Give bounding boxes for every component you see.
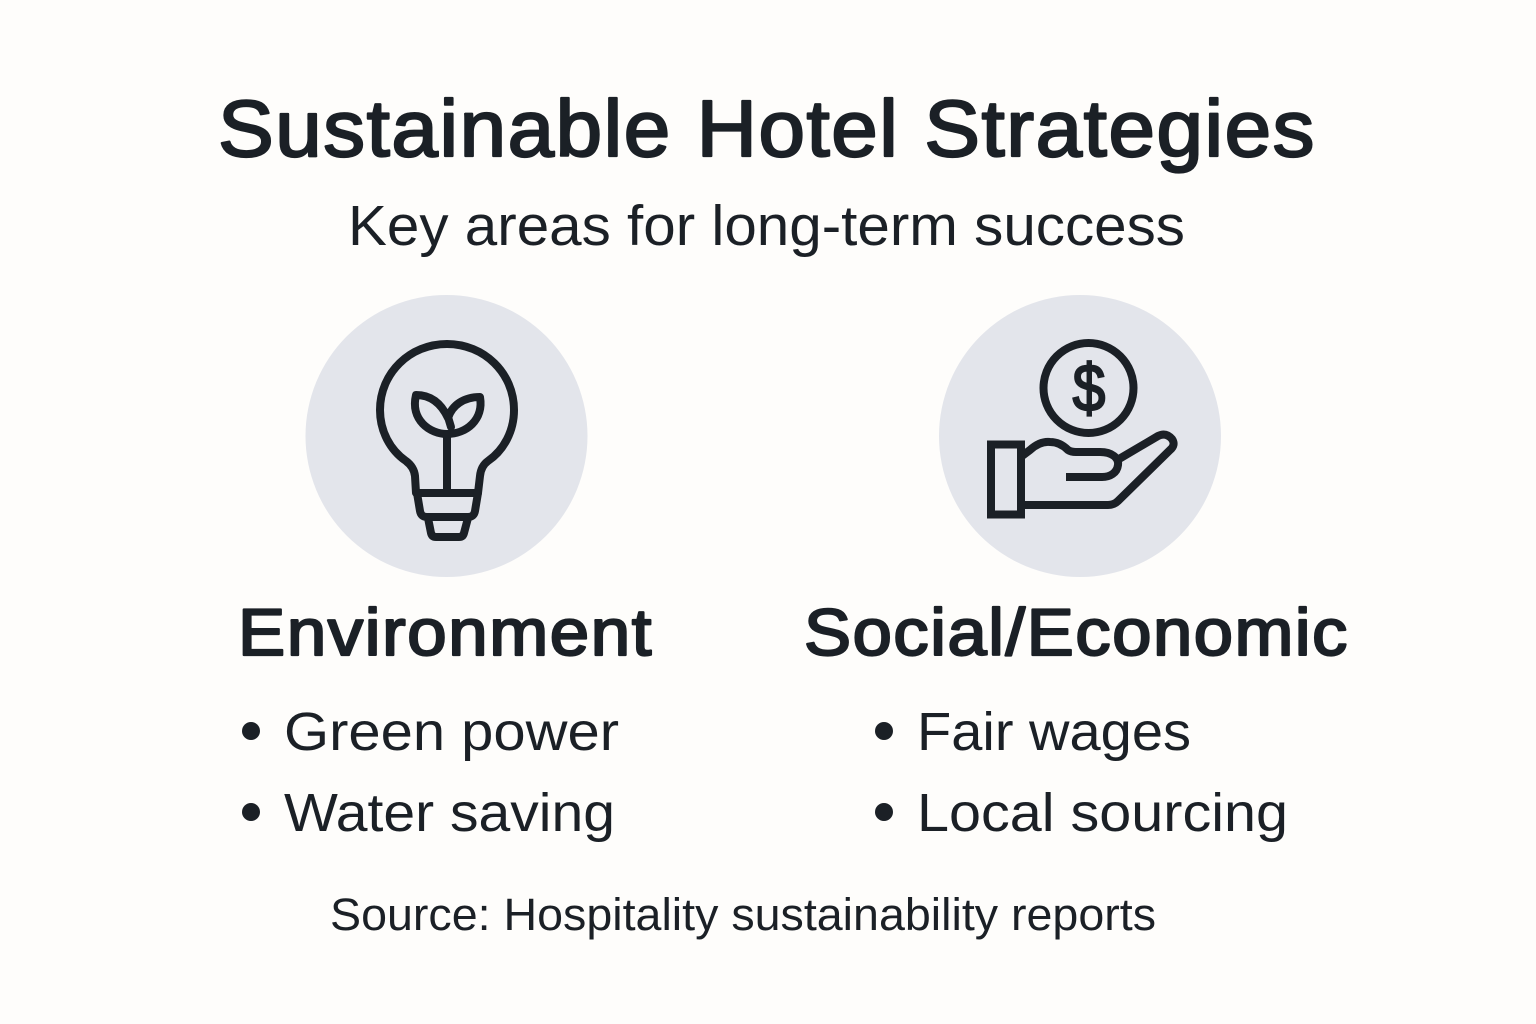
icon: light bulb with sprout bbox=[306, 295, 588, 577]
list: social and economic items bbox=[875, 702, 1288, 843]
panel: environment bbox=[238, 295, 653, 843]
icon: hand holding coin: $ bbox=[1073, 351, 1105, 426]
list: social and economic items: Local sourcing bbox=[917, 783, 1288, 843]
heading: social/economic: Social/Economic bbox=[804, 595, 1349, 669]
list: environment items: Green power bbox=[284, 702, 619, 762]
title: Sustainable Hotel Strategies bbox=[218, 84, 1316, 173]
panel: social and economic bbox=[804, 295, 1349, 843]
list: environment items bbox=[242, 702, 619, 843]
subtitle: Key areas for long-term success bbox=[348, 194, 1185, 258]
list: social and economic items: Fair wages bbox=[917, 702, 1191, 762]
icon: hand holding coin bbox=[939, 295, 1221, 577]
list: environment items: Water saving bbox=[284, 783, 615, 843]
source note: Source: Hospitality sustainability reports bbox=[330, 889, 1156, 940]
heading: environment: Environment bbox=[238, 595, 653, 669]
